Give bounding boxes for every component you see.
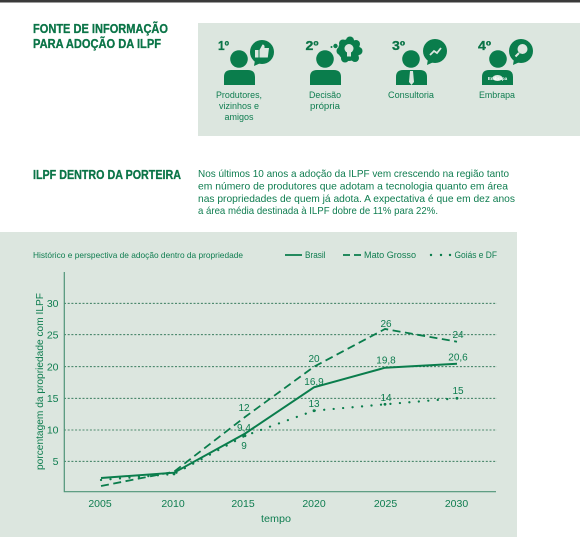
source 2: decisão própria: 2º <box>306 38 319 53</box>
body text paragraph: Nos últimos 10 anos a adoção da ILPF vem crescendo na região tanto <box>198 169 509 180</box>
source 1: produtores <box>216 38 274 122</box>
x axis tick labels: 2025 <box>374 498 397 510</box>
panel: line chart <box>0 232 517 537</box>
body text paragraph: a área média destinada à ILPF dobre de 11% para 22%. <box>198 206 438 217</box>
x axis tick labels: 2020 <box>302 498 326 510</box>
source 4: embrapa: Embrapa <box>479 90 515 100</box>
x axis tick labels <box>88 498 468 510</box>
data labels: 20 <box>308 354 320 365</box>
y axis tick labels: 25 <box>47 330 59 342</box>
series: Brasil <box>101 364 457 478</box>
data labels: 24 <box>452 330 464 341</box>
heading: fonte de informação: PARA ADOÇÃO DA ILPF <box>33 36 161 51</box>
y axis tick labels: 5 <box>53 456 59 468</box>
panel: information sources <box>198 23 580 136</box>
legend: Brasil <box>305 250 326 260</box>
heading: ILPF dentro da porteira: ILPF DENTRO DA PORTEIRA <box>33 168 181 182</box>
source 1: produtores: Produtores, <box>216 90 262 100</box>
x axis tick labels: 2015 <box>231 498 255 510</box>
data labels: 9 <box>241 441 247 452</box>
source 1: produtores: vizinhos e <box>219 101 259 111</box>
source 2: decisão própria <box>306 36 362 111</box>
data labels: 9,4 <box>237 423 251 434</box>
data labels <box>237 319 468 452</box>
y axis tick labels: 15 <box>47 393 59 405</box>
legend: Mato Grosso <box>364 250 416 260</box>
data labels: 19,8 <box>376 356 396 366</box>
series: Mato Grosso <box>101 329 457 486</box>
y axis tick labels: 10 <box>47 424 59 436</box>
series: Goiás e DF <box>101 397 458 480</box>
y axis tick labels: 30 <box>47 298 59 310</box>
source 4: embrapa: Embrapa <box>488 76 508 81</box>
x axis tick labels: 2030 <box>445 498 468 510</box>
data labels: 13 <box>308 399 320 410</box>
data labels: 12 <box>238 403 250 414</box>
source 1: produtores: amigos <box>224 112 254 122</box>
y axis title: porcentagem da propriedade com ILPF <box>35 293 46 470</box>
grid lines <box>64 303 497 461</box>
data labels: 20,6 <box>448 352 468 364</box>
body text paragraph <box>198 169 515 217</box>
heading: fonte de informação: FONTE DE INFORMAÇÃO <box>33 21 168 36</box>
top dark bar <box>0 0 580 2</box>
legend <box>285 250 498 260</box>
body text paragraph: em número de produtores que adotam a tecnologia quanto em área <box>198 182 508 192</box>
axes <box>64 272 496 492</box>
source 4: embrapa <box>478 38 533 100</box>
x axis tick labels: 2010 <box>161 498 185 510</box>
data labels: 15 <box>452 386 464 397</box>
data labels: 14 <box>380 393 392 404</box>
data labels: 26 <box>380 319 392 330</box>
chart title: Histórico e perspectiva de adoção dentro da propriedade <box>33 250 243 260</box>
heading: fonte de informação <box>33 21 168 51</box>
source 1: produtores: 1º <box>218 38 229 53</box>
y axis tick labels <box>47 298 59 468</box>
source 2: decisão própria: Decisão <box>309 90 341 100</box>
source 3: consultoria: Consultoria <box>388 90 434 100</box>
x axis title: tempo <box>261 514 291 525</box>
x axis tick labels: 2005 <box>88 498 112 510</box>
data labels: 16,9 <box>304 377 324 388</box>
source 3: consultoria: 3º <box>392 38 405 53</box>
y axis tick labels: 20 <box>47 362 59 374</box>
legend: Goiás e DF <box>454 250 498 260</box>
source 4: embrapa: 4º <box>478 38 491 53</box>
source 2: decisão própria: própria <box>310 101 340 111</box>
body text paragraph: nas propriedades de quem já adota. A expectativa é que em dez anos <box>198 194 515 205</box>
source 3: consultoria <box>388 38 447 100</box>
